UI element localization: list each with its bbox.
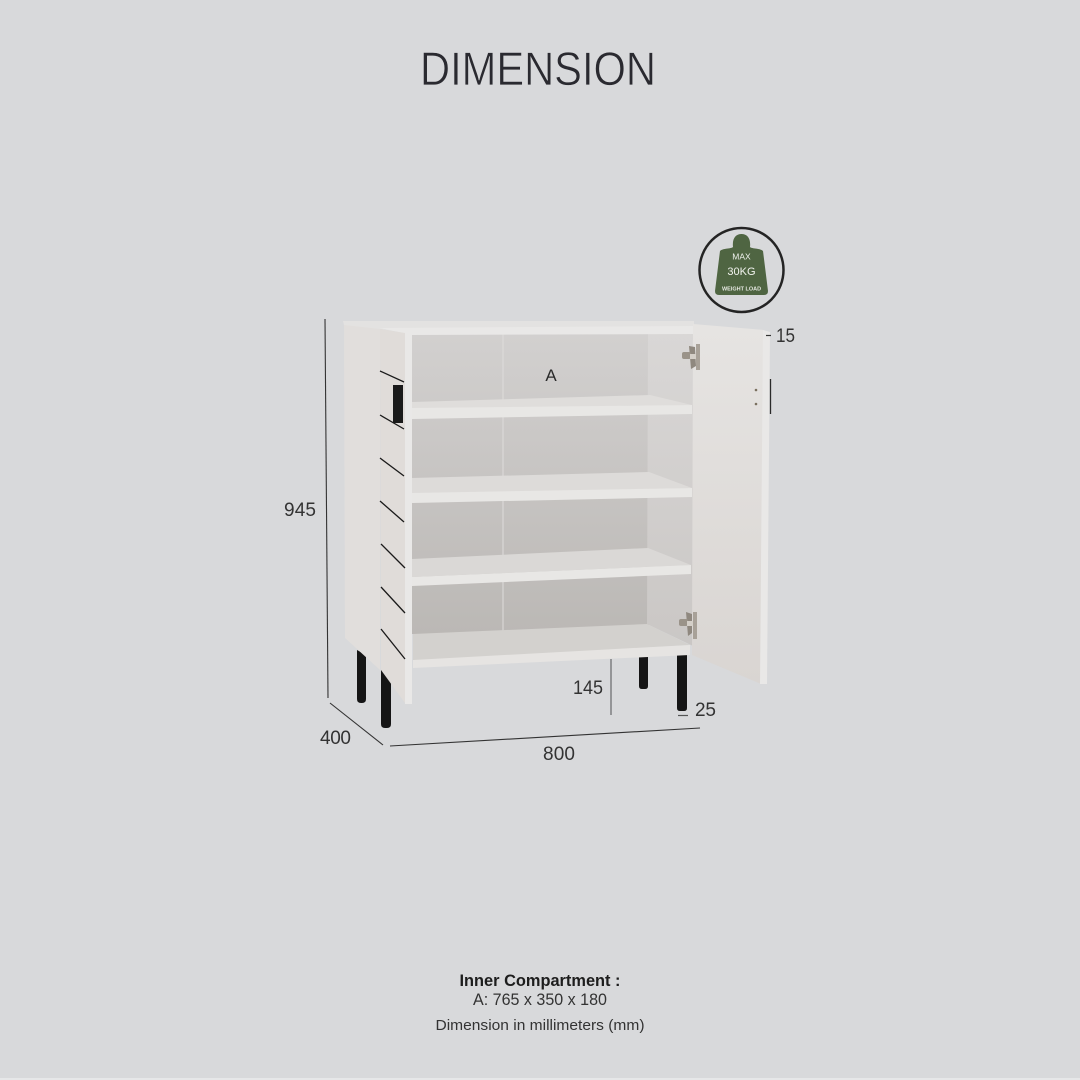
right door — [692, 324, 770, 684]
inner compartment note: A: 765 x 350 x 180 — [473, 991, 607, 1009]
inner compartment note — [436, 972, 645, 1034]
icon: weight load badge: WEIGHT LOAD — [722, 286, 761, 292]
icon: weight load badge: MAX — [732, 252, 751, 262]
arrow: depth dimension line — [330, 703, 383, 745]
icon: weight load badge — [700, 228, 784, 312]
bottom shelf — [413, 624, 690, 668]
arrow: width dimension line — [390, 728, 700, 746]
arrow: door thickness tick — [766, 334, 771, 336]
shelf 3 — [412, 548, 691, 586]
cabinet — [343, 321, 770, 728]
icon: upper hinge — [682, 344, 700, 370]
label: depth 400: 400 — [320, 728, 351, 749]
legs: rear left, front left, rear right, front right — [357, 650, 687, 728]
left door — [380, 329, 412, 704]
back wall — [412, 334, 649, 634]
shelf 2 — [412, 472, 692, 503]
door grooves — [380, 371, 405, 659]
label: height 945: 945 — [284, 500, 316, 521]
label: compartment A: A — [545, 366, 557, 385]
icon: lower hinge — [679, 612, 697, 639]
inner compartment note: Dimension in millimeters (mm) — [436, 1017, 645, 1034]
top board — [343, 321, 694, 334]
label: width 800: 800 — [543, 744, 575, 765]
icon: weight load badge: 30KG — [727, 266, 756, 278]
label: leg height 145: 145 — [573, 678, 603, 699]
label: leg diameter 25: 25 — [695, 700, 716, 721]
arrow: leg diameter tick — [678, 714, 688, 716]
right inner wall — [647, 333, 693, 646]
arrow: leg height line — [610, 659, 612, 715]
label: door thickness 15: 15 — [776, 326, 795, 347]
title: DIMENSION — [420, 42, 656, 95]
shelf 1 — [412, 395, 692, 419]
door handle — [393, 385, 403, 423]
side panel — [344, 322, 380, 670]
arrow: height dimension line — [325, 319, 328, 698]
inner compartment note: Inner Compartment : — [460, 972, 620, 990]
